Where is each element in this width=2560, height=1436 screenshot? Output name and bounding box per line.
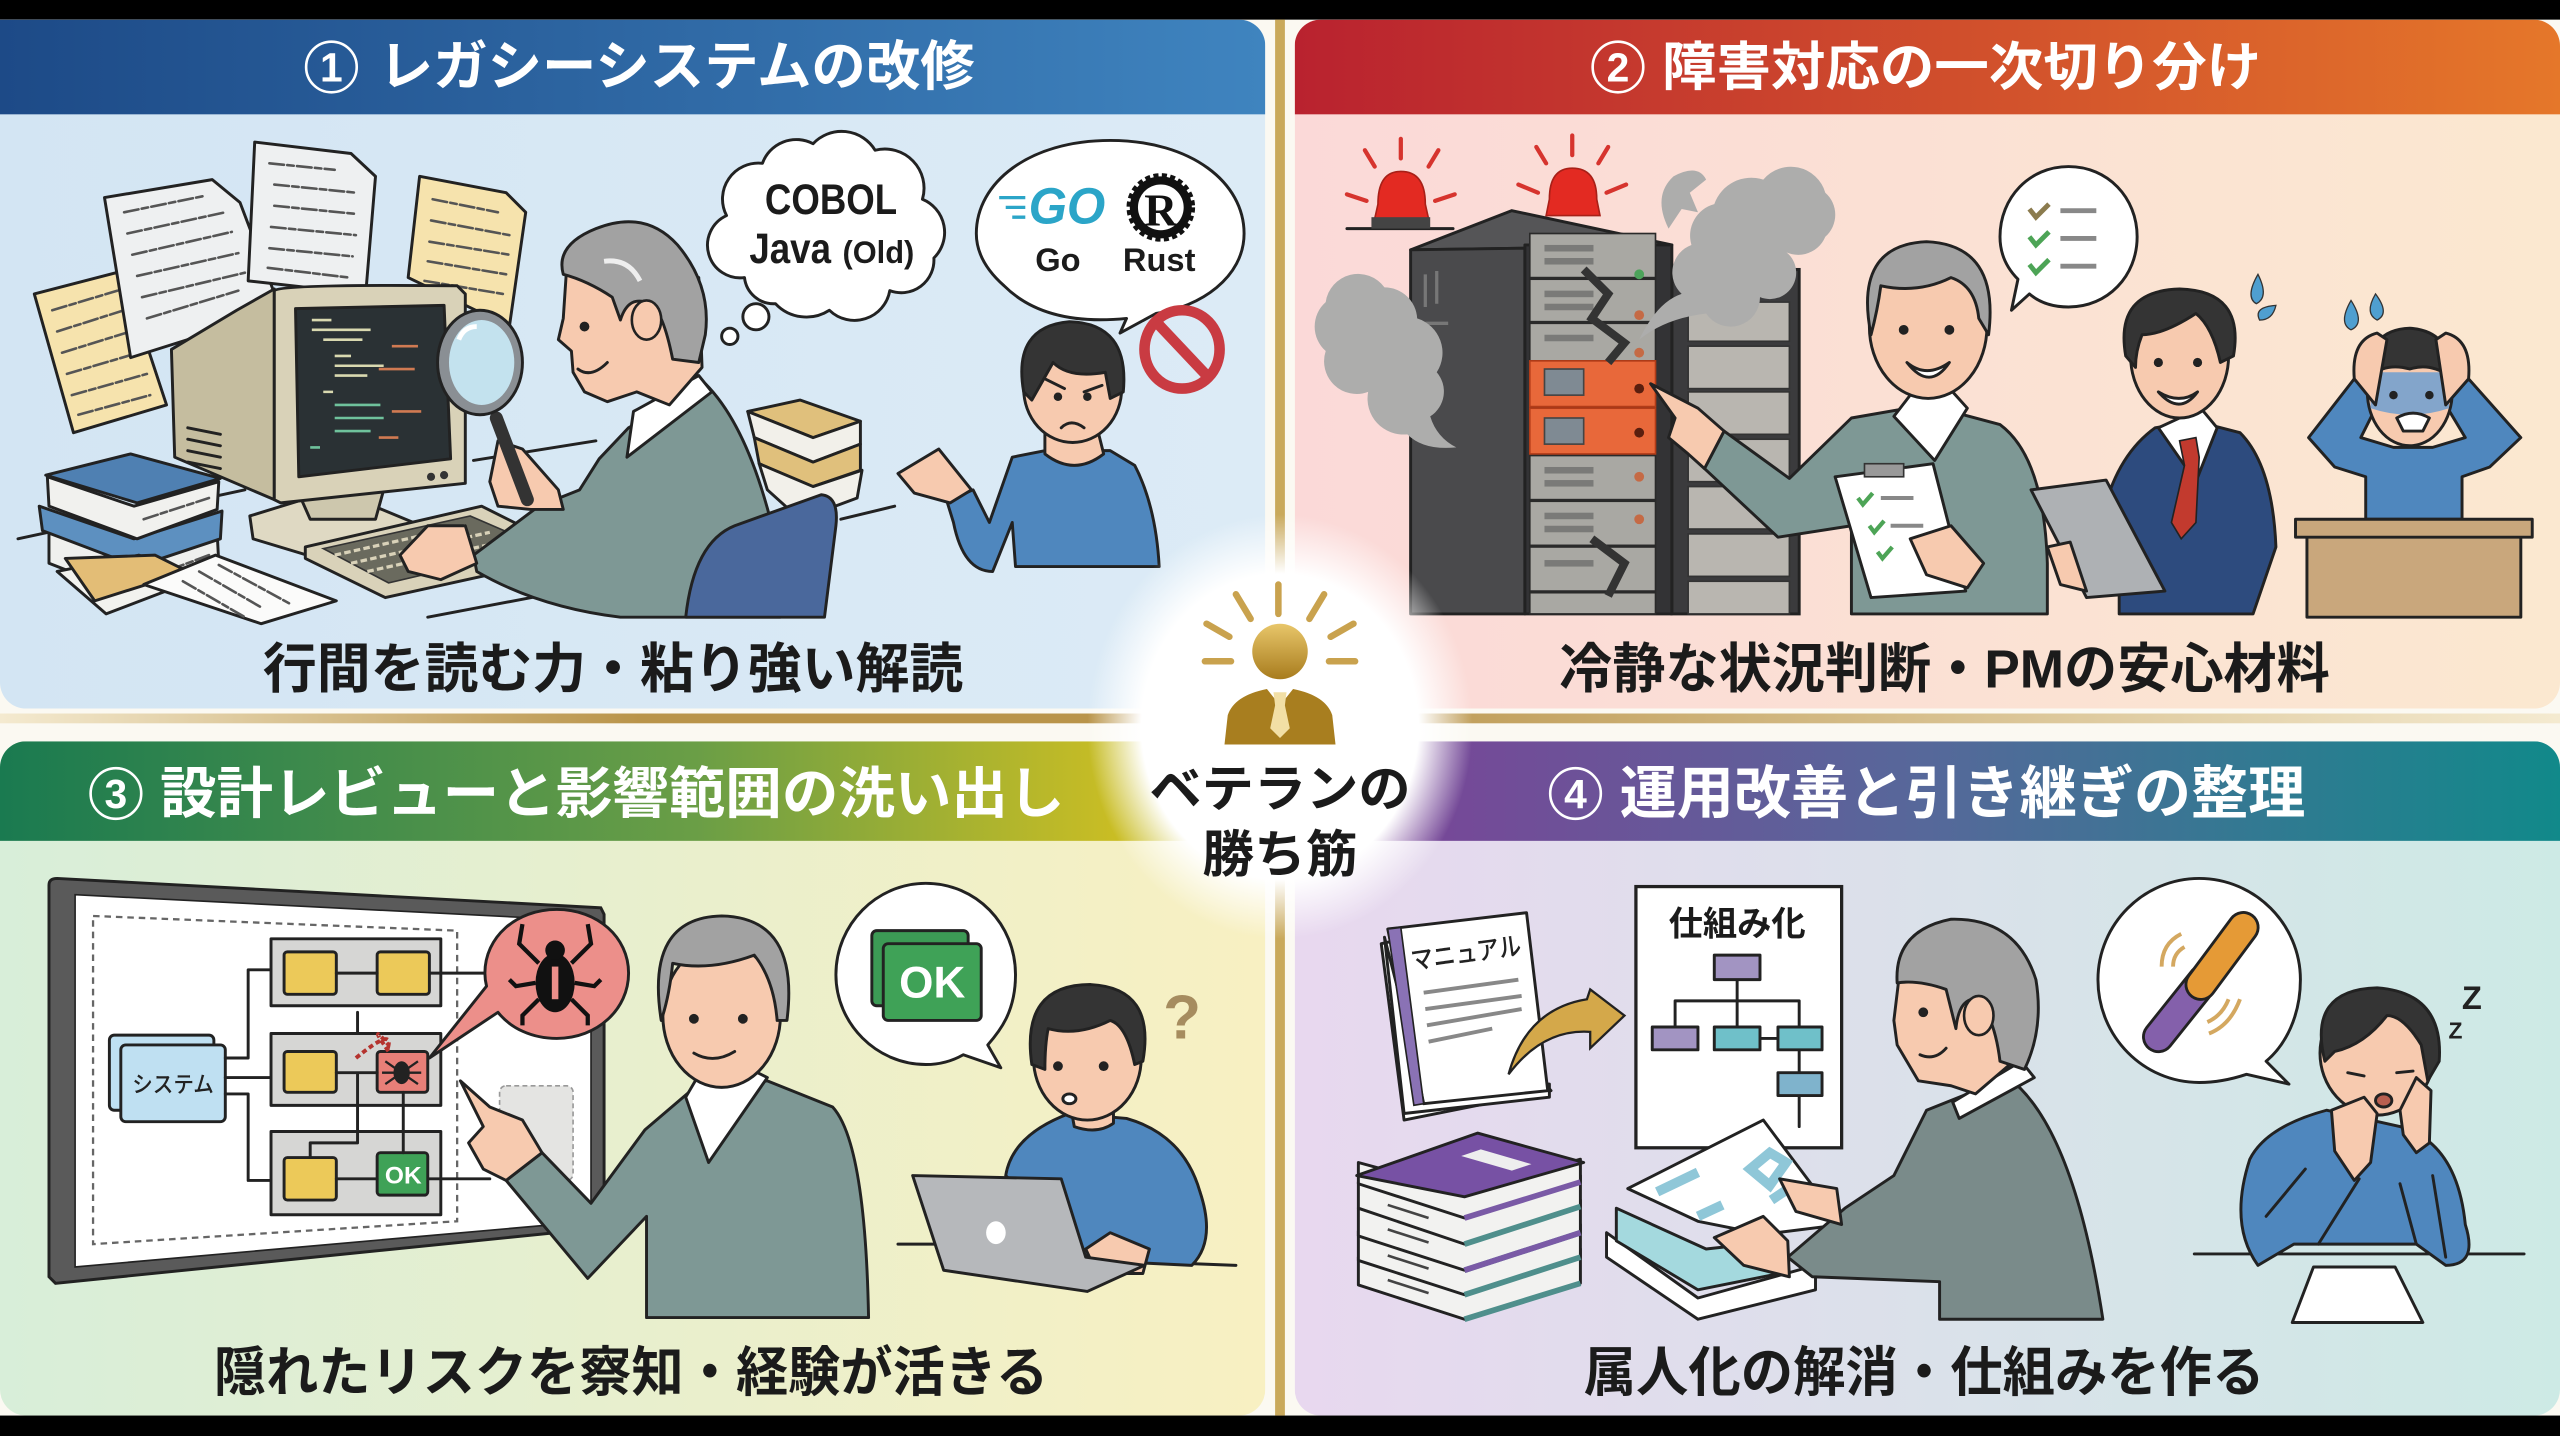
caption 3: 隠れたリスクを察知・経験が活きる [214, 1343, 1048, 1403]
heading bar 3: 設計レビューと影響範囲の洗い出し [160, 763, 1064, 825]
question mark: ? [1163, 983, 1201, 1052]
heading bar 4: 4 [1564, 771, 1587, 817]
chair [686, 495, 836, 617]
manual: マニュアル [1409, 931, 1523, 976]
junior engineer [898, 322, 1159, 571]
tablet [2031, 480, 2165, 598]
junior panicking [2309, 294, 2521, 519]
server racks [1411, 211, 1799, 614]
magnifying glass [438, 310, 527, 500]
speech bubble: marker pen [2098, 878, 2300, 1084]
whiteboard [49, 878, 604, 1283]
alarm lights [1347, 136, 1626, 229]
panel: legacy system modification [0, 20, 1265, 709]
project manager [2101, 274, 2276, 614]
thought bubble: (Old) [842, 235, 914, 270]
smoke clouds [1315, 167, 1835, 448]
speech bubble: Go and Rust: Go [1035, 241, 1081, 278]
center title: ベテランの [1149, 761, 1411, 818]
book stack right [748, 400, 862, 519]
center badge: veteran's winning path: 勝ち筋 [1202, 826, 1358, 883]
heading bar 4: 運用改善と引き継ぎの整理 [1620, 762, 2305, 826]
filing box [1607, 1120, 1842, 1319]
callout: bug [429, 909, 629, 1058]
veteran engineer [400, 222, 780, 617]
loose papers [57, 555, 336, 624]
thought bubble [707, 131, 945, 345]
speech bubble: OK [836, 883, 1016, 1068]
sleepy junior: Z [2462, 979, 2482, 1016]
white glow [1087, 514, 1473, 939]
retro computer [171, 285, 465, 565]
panel: operations and handover [1295, 741, 2560, 1416]
system box: システム [132, 1071, 214, 1097]
panel: incident triage [1295, 20, 2560, 709]
heading bar 2 [1295, 20, 2560, 114]
system box [109, 1035, 225, 1122]
diagram sheet [1636, 887, 1842, 1148]
book stack [1357, 1133, 1584, 1319]
veteran engineer organizing [1714, 919, 2103, 1319]
icon: Rust gear [1130, 176, 1192, 238]
thought bubble: Java [749, 225, 831, 272]
manual [1381, 913, 1551, 1120]
face [558, 269, 702, 405]
documents [34, 142, 526, 433]
speech bubble: Go and Rust: GO [1029, 178, 1105, 235]
module rows: OK [385, 1163, 422, 1190]
panel: design review [0, 741, 1265, 1416]
heading bar 3 [0, 741, 1265, 841]
sleepy junior: Z [2449, 1017, 2463, 1043]
keyboard [304, 504, 516, 600]
icon: Rust gear: R [1144, 184, 1178, 235]
heading bar 2: 2 [1607, 45, 1629, 91]
heading bar 4 [1295, 741, 2560, 841]
suit body [473, 384, 780, 617]
center badge: veteran's winning path [1087, 514, 1473, 939]
speech bubble: Go and Rust: Rust [1123, 241, 1196, 278]
speech bubble: checklist [2000, 167, 2137, 310]
heading bar 2: 障害対応の一次切り分け [1662, 39, 2261, 97]
speech bubble: OK: OK [899, 959, 965, 1008]
hair [562, 222, 706, 362]
veteran engineer pointing [1651, 242, 2047, 614]
icon: person with light rays [1205, 585, 1355, 745]
collar [627, 376, 712, 457]
icon: prohibited [1144, 310, 1220, 389]
hand with magnifier [490, 441, 563, 509]
junior with laptop [898, 985, 1236, 1291]
caption 1: 行間を読む力・粘り強い解読 [263, 639, 963, 699]
desk line [18, 441, 895, 617]
arrow [1509, 989, 1624, 1074]
sleepy junior [2194, 979, 2524, 1322]
speech bubble: Go and Rust [976, 140, 1244, 333]
caption 2: 冷静な状況判断・PMの安心材料 [1559, 639, 2330, 699]
heading bar 3: 3 [105, 771, 127, 817]
caption 4: 属人化の解消・仕組みを作る [1584, 1343, 2264, 1403]
desk [2296, 519, 2532, 617]
clipboard [1835, 464, 1984, 598]
thought bubble: COBOL [765, 176, 897, 223]
diagram sheet: 仕組み化 [1669, 906, 1806, 944]
heading bar 1: 1 [320, 45, 343, 91]
veteran engineer presenting [460, 916, 869, 1318]
module rows [271, 939, 490, 1215]
heading bar 1: レガシーシステムの改修 [379, 37, 975, 97]
book stack left [38, 452, 224, 570]
heading bar 1 [0, 20, 1265, 114]
